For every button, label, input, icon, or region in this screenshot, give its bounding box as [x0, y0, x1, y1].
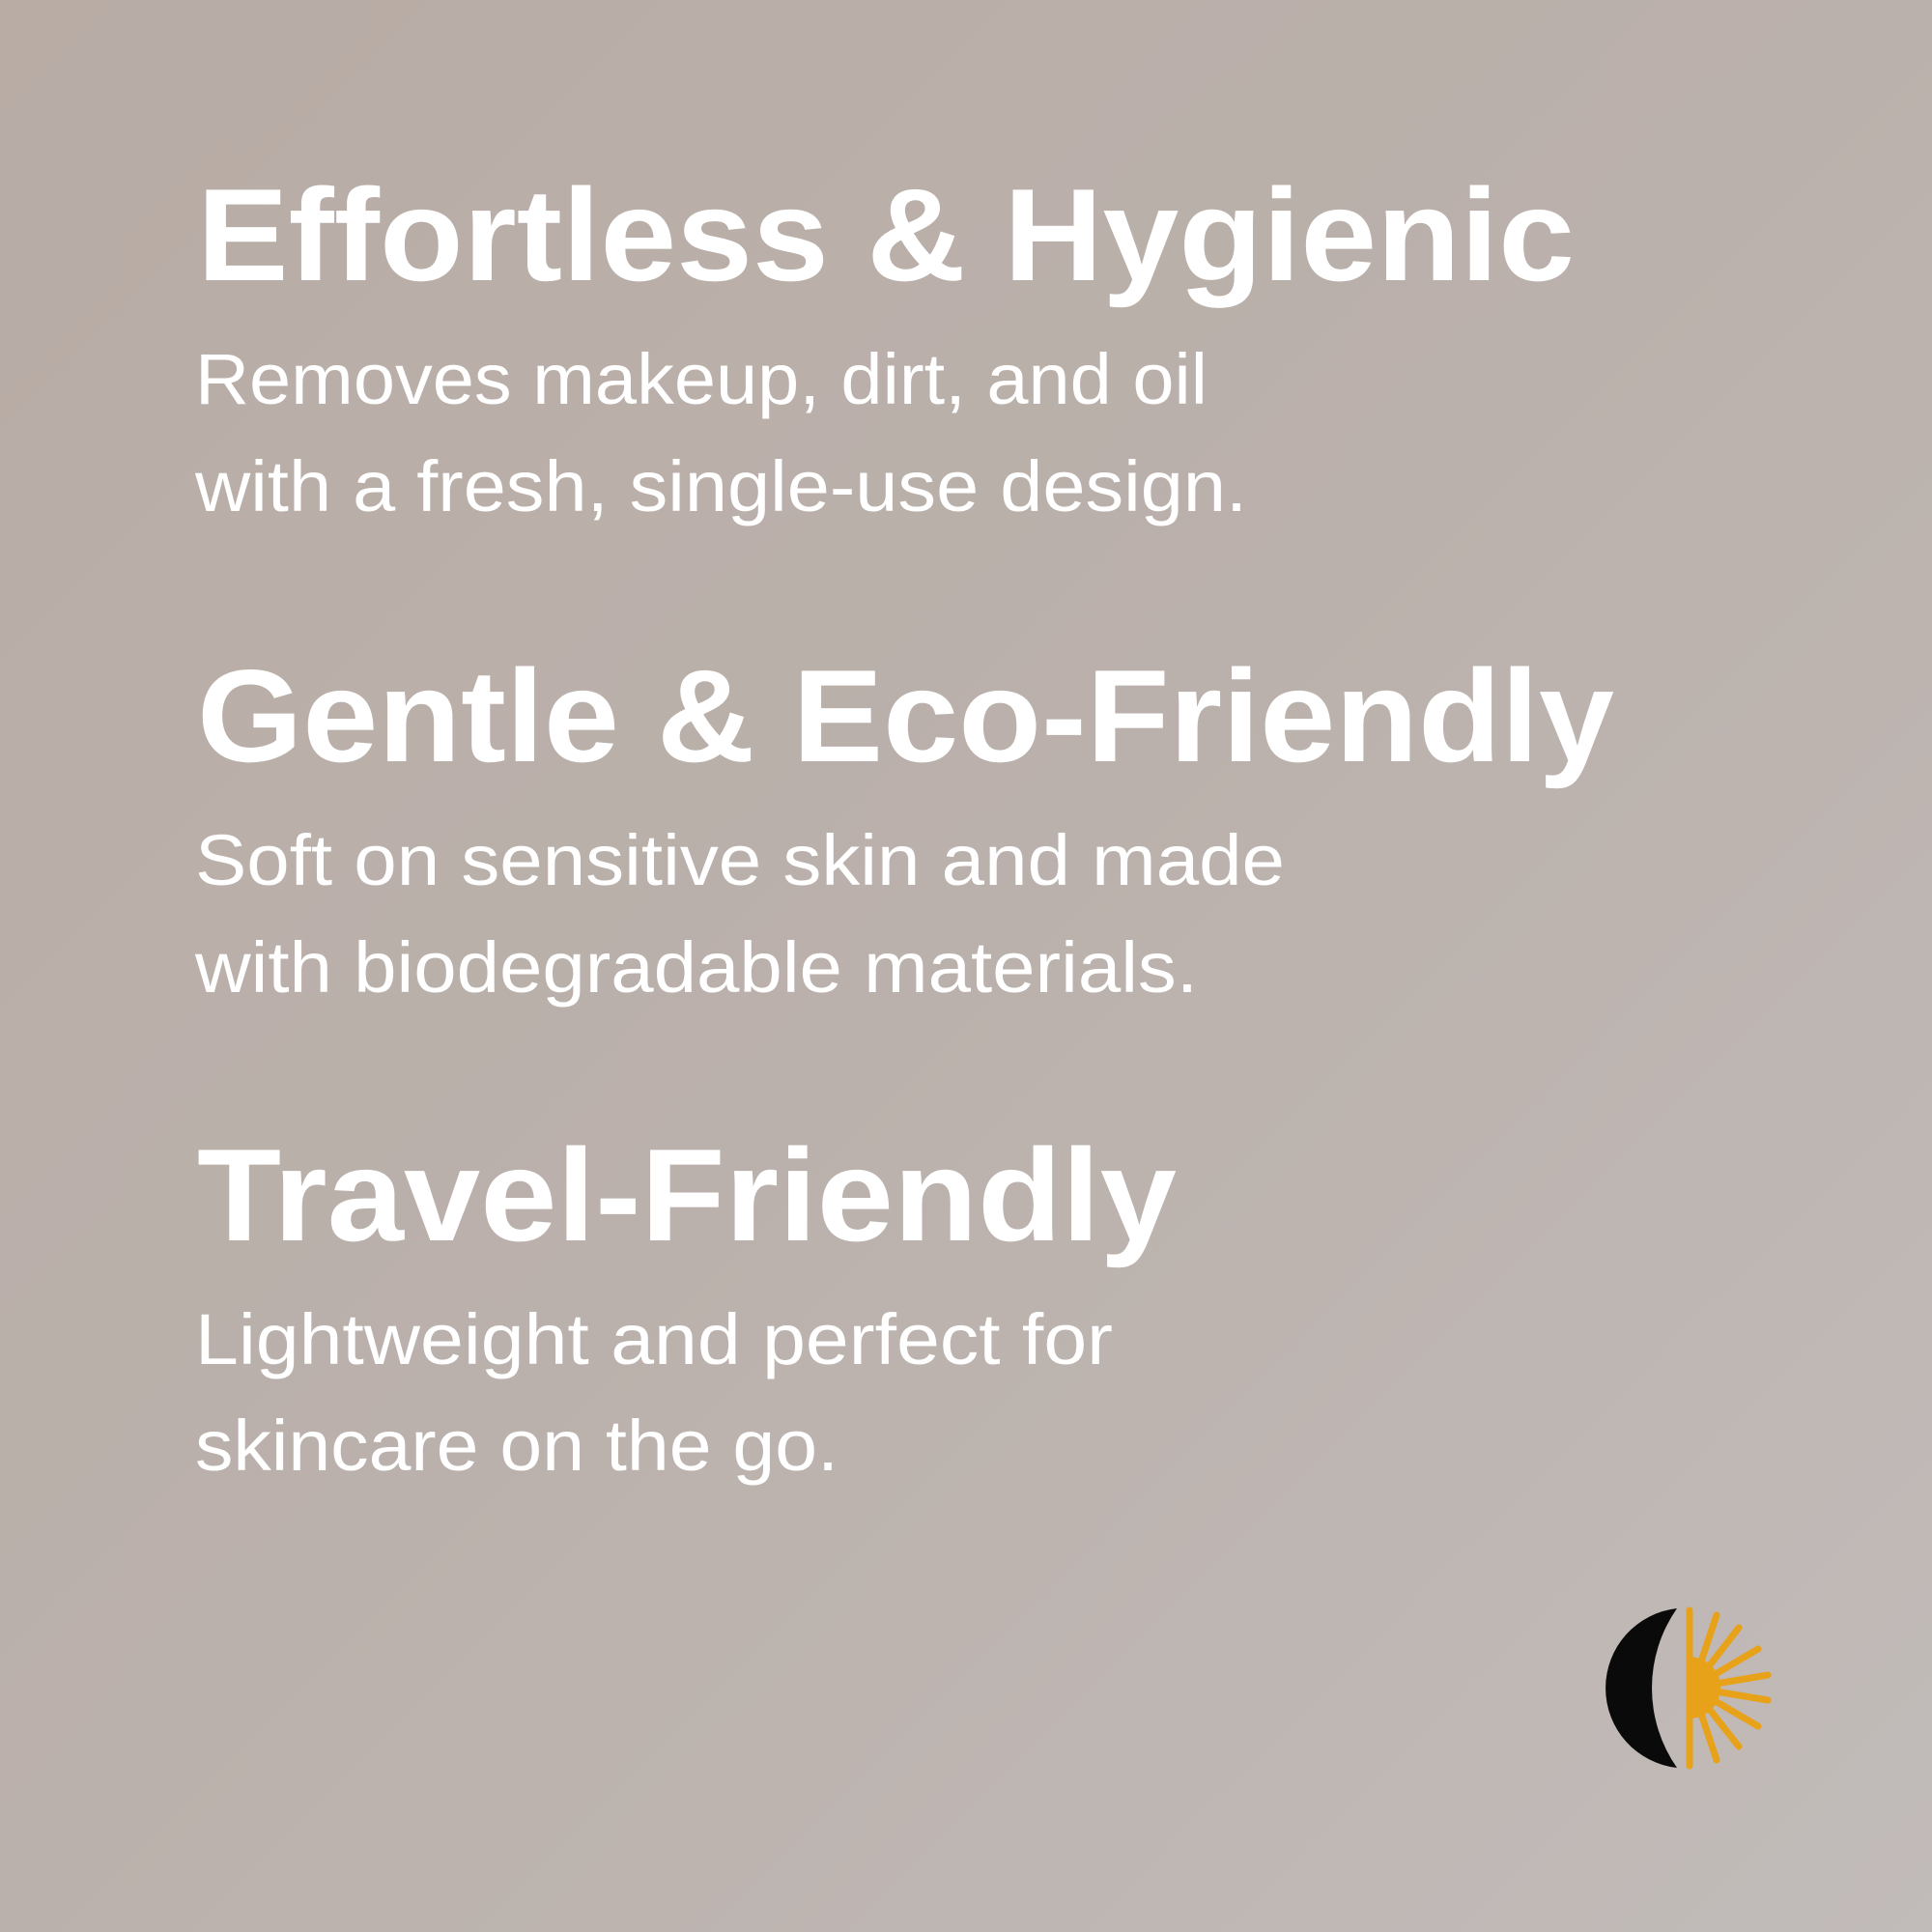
text block: effortless description — [194, 339, 1247, 526]
text block: effortless description: Removes makeup, dirt, and oil — [195, 339, 1208, 419]
text block: travel description: skincare on the go. — [195, 1406, 838, 1486]
section: travel-friendly — [195, 1122, 1177, 1486]
text block: effortless description: with a fresh, single-use design. — [194, 446, 1247, 526]
text block: travel description — [195, 1299, 1113, 1486]
text block: travel description: Lightweight and perfect for — [195, 1299, 1113, 1379]
heading: Effortless & Hygienic: Effortless & Hygienic — [197, 161, 1575, 308]
section: effortless & hygienic — [194, 161, 1575, 526]
icon: moon and sun logo — [1605, 1608, 1768, 1768]
text block: gentle description: Soft on sensitive skin and made — [195, 820, 1285, 900]
text block: gentle description: with biodegradable materials. — [194, 927, 1198, 1008]
icon: crescent moon — [1605, 1608, 1677, 1768]
section: gentle & eco-friendly — [194, 642, 1614, 1008]
text block: gentle description — [194, 820, 1285, 1008]
icon: sun rays — [1690, 1610, 1768, 1766]
heading: Travel-Friendly: Travel-Friendly — [197, 1122, 1177, 1268]
heading: Gentle & Eco-Friendly: Gentle & Eco-Friendly — [197, 642, 1614, 789]
